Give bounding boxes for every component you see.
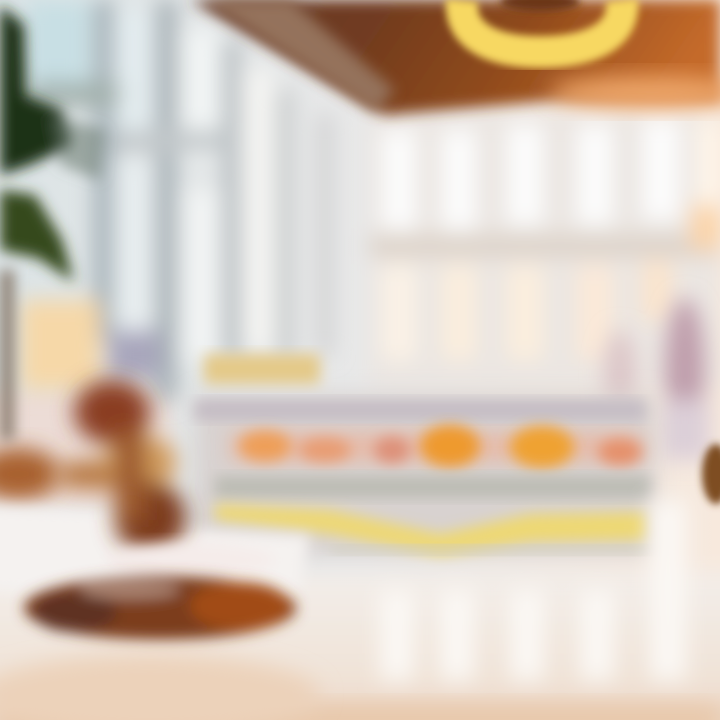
warm wall behind bear	[0, 390, 170, 510]
orange row	[232, 434, 642, 460]
wooden ceiling panel	[190, 0, 720, 115]
shelf backdrop	[195, 395, 655, 555]
grey shadow under band	[330, 546, 650, 554]
left orange haze	[0, 448, 60, 500]
warm bottom edge	[0, 705, 720, 720]
palm plant	[0, 5, 105, 440]
distant pink figures	[604, 298, 710, 460]
right brown object	[702, 444, 720, 504]
bear arm	[53, 461, 137, 489]
ceiling glow	[550, 76, 720, 108]
pale floor	[0, 572, 720, 720]
yellow lower band	[215, 504, 648, 556]
wooden tray	[24, 576, 296, 640]
floor and table	[0, 500, 720, 720]
grey shelf row	[215, 476, 650, 498]
white table cloth	[0, 505, 310, 600]
round table edge	[0, 655, 320, 720]
floor reflections	[380, 500, 686, 680]
right window wall	[370, 115, 720, 390]
bear body	[114, 482, 186, 554]
bear neck	[115, 430, 145, 520]
white plate	[105, 543, 275, 577]
yellow upper sign	[204, 354, 320, 384]
bear head	[74, 380, 150, 444]
mauve shelf row	[195, 400, 645, 420]
left window wall	[20, 0, 332, 400]
bear light chest	[104, 436, 176, 488]
bear figurine	[53, 380, 186, 554]
icon: yellow ceiling ring light	[462, 0, 622, 52]
ceiling	[190, 0, 720, 115]
central display shelves	[195, 354, 655, 556]
ceiling beam	[205, 0, 395, 112]
